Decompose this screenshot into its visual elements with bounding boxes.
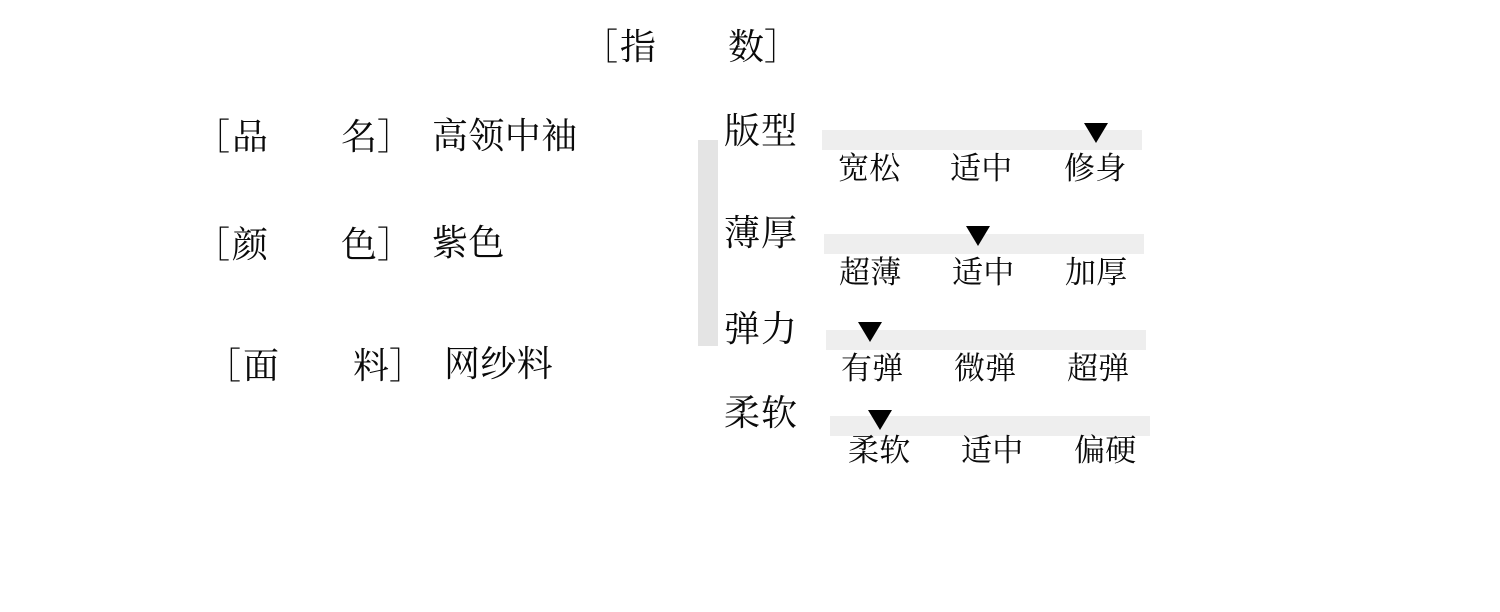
thickness scale bar (824, 234, 1144, 254)
product name label end: 名 (341, 117, 378, 157)
heading: index (582, 19, 657, 70)
product name label end: ］ (377, 109, 413, 160)
panel: softness scale (724, 393, 1150, 468)
elasticity scale bar (826, 330, 1146, 350)
product name value: 高领中袖 (432, 116, 578, 156)
colour label end: 色 (341, 225, 378, 265)
colour label (194, 217, 269, 268)
fabric label: 面 (243, 346, 280, 386)
heading: index: 指 (620, 27, 657, 67)
softness marker (868, 410, 892, 430)
fabric label end (353, 338, 425, 389)
fabric label (205, 338, 280, 389)
fit marker (1084, 123, 1108, 143)
elasticity option slight: 微弹 (954, 351, 1017, 386)
panel: product details: ［ (205, 338, 241, 389)
thickness label: 薄厚 (724, 213, 798, 253)
panel: thickness scale (724, 213, 1144, 290)
thickness option thin: 超薄 (839, 255, 902, 290)
fit label: 版型 (724, 111, 798, 151)
elasticity label: 弹力 (724, 309, 798, 349)
panel: fit scale (724, 111, 1142, 186)
panel: elasticity scale (724, 309, 1146, 386)
heading: index second part: 数 (728, 27, 765, 67)
colour label: 颜 (232, 225, 269, 265)
product name label (194, 109, 269, 160)
colour label end (341, 217, 413, 268)
fit option loose: 宽松 (838, 151, 901, 186)
product name label end (341, 109, 413, 160)
thickness marker (966, 226, 990, 246)
product name label: 品 (232, 117, 269, 157)
softness label: 柔软 (724, 393, 798, 433)
softness scale bar (830, 416, 1150, 436)
fabric label end: 料 (353, 346, 390, 386)
text: ［ (194, 217, 230, 268)
panel: product details (194, 109, 578, 389)
elasticity marker (858, 322, 882, 342)
vertical divider bar (698, 140, 718, 346)
thickness option medium: 适中 (952, 255, 1015, 290)
elasticity option stretchy: 有弹 (841, 351, 904, 386)
fit option slim: 修身 (1064, 151, 1127, 186)
text: ［ (194, 109, 230, 160)
fit scale bar (822, 130, 1142, 150)
text: ［ (582, 19, 618, 70)
heading: index second part (728, 19, 800, 70)
elasticity option super: 超弹 (1067, 351, 1130, 386)
heading: index second part: ］ (764, 19, 800, 70)
fabric label end: ］ (389, 338, 425, 389)
fabric value: 网纱料 (444, 344, 553, 384)
colour label end: ］ (377, 217, 413, 268)
thickness option thick: 加厚 (1065, 255, 1128, 290)
softness option medium: 适中 (961, 433, 1024, 468)
softness option soft: 柔软 (848, 433, 911, 468)
fit option medium: 适中 (950, 151, 1013, 186)
softness option hard: 偏硬 (1074, 433, 1137, 468)
colour value: 紫色 (432, 223, 505, 263)
